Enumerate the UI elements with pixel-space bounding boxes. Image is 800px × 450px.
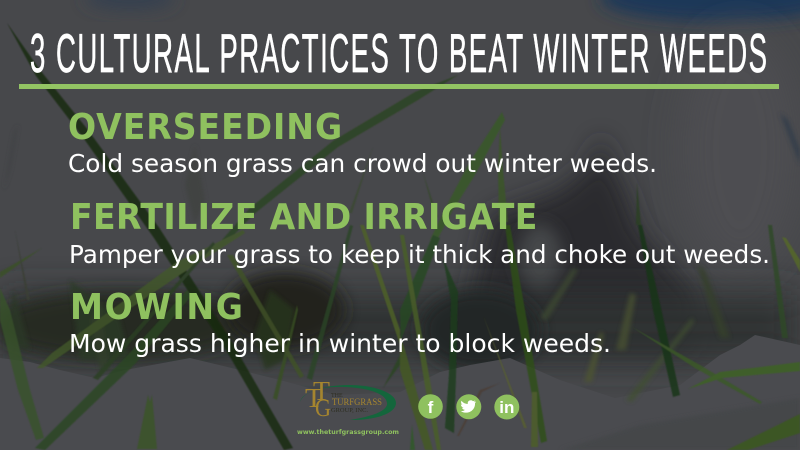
text: overseeding description: Cold season grass can crowd out winter weeds. (68, 149, 657, 178)
icon: facebook: f (428, 398, 434, 417)
logo: the turfgrass group: T (305, 383, 324, 413)
icon: linkedin: in (499, 398, 514, 417)
section: fertilize and irrigate (69, 197, 770, 269)
section: mowing (69, 287, 611, 358)
icon: twitter (456, 394, 481, 419)
icon: facebook (418, 394, 443, 419)
logo: the turfgrass group: T (313, 376, 331, 406)
heading: overseeding: OVERSEEDING (68, 107, 342, 148)
logo: the turfgrass group: TURFGRASS (332, 397, 382, 407)
long diagonal blade (7, 23, 293, 450)
logo: the turfgrass group: THE (331, 393, 343, 399)
title underline (19, 84, 779, 89)
text: mowing description: Mow grass higher in winter to block weeds. (69, 329, 611, 358)
icon: linkedin (494, 394, 519, 420)
title: 3 CULTURAL PRACTICES TO BEAT WINTER WEEDS (30, 24, 767, 85)
logo: the turfgrass group (300, 376, 396, 422)
website url: www.theturfgrassgroup.com (297, 428, 399, 436)
heading: fertilize and irrigate: FERTILIZE AND IRRIGATE (70, 197, 537, 238)
logo: the turfgrass group: GROUP, INC. (331, 407, 368, 414)
text: fertilize description: Pamper your grass to keep it thick and choke out weeds. (69, 240, 770, 269)
section: overseeding (68, 107, 657, 178)
heading: mowing: MOWING (70, 287, 243, 328)
logo: the turfgrass group: G (315, 395, 331, 422)
